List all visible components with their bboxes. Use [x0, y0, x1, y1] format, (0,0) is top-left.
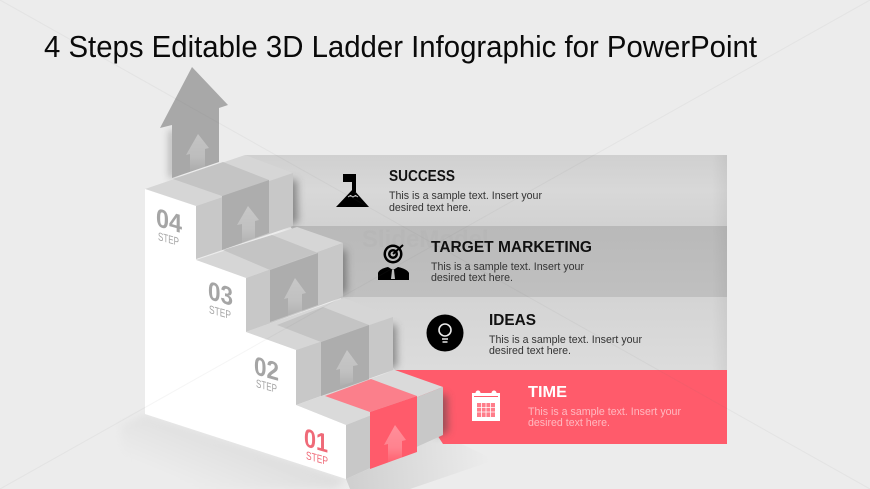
- label: 02 step: STEP: [256, 377, 277, 396]
- big arrow: [160, 67, 228, 178]
- panel: success: SUCCESS: [389, 168, 455, 185]
- label: 03 step: STEP: [209, 303, 231, 322]
- label: 04 step: STEP: [158, 230, 179, 249]
- panel: target marketing: TARGET MARKETING: [431, 239, 592, 256]
- icon: target head: [378, 244, 409, 280]
- panel: target marketing: This is a sample text. Insert your: [431, 261, 584, 273]
- floor shadow: [120, 414, 495, 489]
- label: 01 step: 01: [304, 422, 328, 459]
- white staircase front: [145, 189, 346, 479]
- panel: time: This is a sample text. Insert your: [528, 406, 681, 418]
- panel: success: This is a sample text. Insert your: [389, 190, 542, 202]
- watermark: SlideModel: [362, 226, 489, 253]
- panel: ideas: This is a sample text. Insert your: [489, 334, 642, 346]
- step labels: [156, 202, 328, 468]
- small arrow on big arrow: [186, 134, 209, 172]
- panel: ideas: desired text here.: [489, 345, 571, 357]
- icon: calendar: [472, 390, 500, 421]
- panel: time: [395, 370, 727, 444]
- label: 04 step: 04: [156, 202, 182, 239]
- label: 03 step: 03: [208, 275, 233, 312]
- panel: ideas: IDEAS: [489, 312, 536, 329]
- panel: success: [245, 155, 727, 226]
- panel: time: TIME: [528, 384, 567, 401]
- arrow: step 2: [336, 350, 358, 386]
- step 1: [296, 370, 443, 479]
- panel: target marketing: [290, 226, 727, 297]
- panel: target marketing: desired text here.: [431, 272, 513, 284]
- panel: time: desired text here.: [528, 417, 610, 429]
- arrow: step 3: [284, 278, 306, 317]
- title: 4 Steps Editable 3D Ladder Infographic for PowerPoint: [44, 30, 758, 64]
- label: 02 step: 02: [254, 350, 279, 387]
- step 3: [196, 227, 343, 332]
- panel: ideas: [340, 297, 727, 370]
- arrow: step 1: [384, 425, 406, 463]
- arrow: step 4: [237, 206, 259, 245]
- shadows behind steps: [170, 130, 448, 436]
- step 2: [245, 298, 393, 405]
- label: 01 step: STEP: [306, 449, 328, 468]
- icon: mountain flag: [336, 174, 369, 207]
- panel: success: desired text here.: [389, 202, 471, 214]
- step 4: [145, 155, 293, 259]
- icon: light bulb: [426, 314, 464, 352]
